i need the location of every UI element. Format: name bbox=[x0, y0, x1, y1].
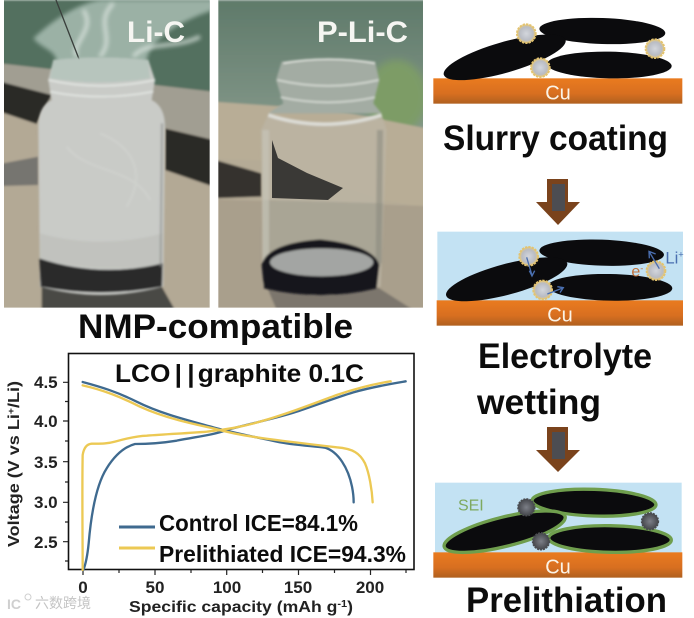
jar bbox=[261, 58, 387, 295]
particles with SEI bbox=[441, 487, 672, 561]
y axis title: Voltage (V vs Li bbox=[6, 433, 23, 547]
copper substrate bbox=[433, 78, 682, 104]
x axis numbers bbox=[78, 578, 384, 597]
x axis numbers: 150 bbox=[284, 578, 312, 597]
label: Li+: Li bbox=[665, 248, 678, 267]
heading: Electrolyte: Electrolyte bbox=[478, 337, 652, 376]
label: Li-C: Li-C bbox=[127, 16, 185, 49]
label: SEI: SEI bbox=[458, 497, 484, 514]
y axis title: + bbox=[6, 408, 16, 414]
y axis numbers: 3.5 bbox=[34, 453, 58, 472]
diagram: slurry coating stage bbox=[433, 16, 682, 104]
y axis numbers: 4.5 bbox=[34, 373, 58, 392]
label: e-: e bbox=[631, 264, 640, 281]
jar bbox=[38, 57, 165, 295]
active particles bbox=[440, 16, 672, 90]
dark spheres bbox=[518, 499, 658, 550]
control curve bbox=[83, 381, 406, 570]
axis ticks bbox=[63, 382, 406, 575]
watermark: 六数跨境 bbox=[35, 595, 91, 611]
x axis numbers: 0 bbox=[78, 578, 88, 597]
label: Cu: Cu bbox=[547, 304, 573, 326]
electrolyte bbox=[437, 232, 683, 302]
x axis numbers: 50 bbox=[146, 578, 164, 597]
curves bbox=[82, 381, 406, 570]
electrolyte bbox=[435, 483, 682, 553]
x axis numbers: 100 bbox=[213, 578, 241, 597]
heading: Slurry coating: Slurry coating bbox=[443, 119, 668, 158]
copper substrate bbox=[433, 552, 682, 578]
label: Cu: Cu bbox=[545, 82, 571, 104]
ion arrows bbox=[527, 251, 659, 294]
chart: voltage vs specific capacity bbox=[6, 354, 414, 616]
photo: P-Li-C jar bbox=[213, 0, 427, 310]
y axis numbers bbox=[34, 373, 58, 552]
watermark: IC bbox=[7, 596, 21, 612]
diagram: prelithiation stage bbox=[433, 483, 682, 578]
x axis title: -1 bbox=[337, 599, 348, 610]
label: Li+: + bbox=[678, 249, 684, 259]
y axis numbers: 3.0 bbox=[34, 493, 58, 512]
legend: prelithiated: Prelithiated ICE=94.3% bbox=[159, 541, 406, 567]
photo detail: dark shadow seen through P-Li-C jar bbox=[272, 140, 343, 200]
label: e-: - bbox=[640, 263, 643, 273]
chart title: LCO ||graphite 0.1C bbox=[115, 360, 364, 388]
y axis title: /Li) bbox=[6, 381, 23, 408]
legend: control: Control ICE=84.1% bbox=[159, 510, 358, 536]
x axis title: ) bbox=[347, 599, 353, 616]
arrow: down to prelithiation bbox=[536, 427, 580, 472]
diagram: electrolyte wetting stage bbox=[437, 232, 684, 326]
plot frame bbox=[68, 354, 414, 570]
copper substrate bbox=[437, 300, 683, 326]
lithium spheres bbox=[517, 24, 664, 77]
x axis title: Specific capacity (mAh g bbox=[129, 599, 318, 616]
watermark bbox=[7, 594, 91, 612]
prelithiated curve bbox=[82, 381, 391, 570]
x axis numbers: 200 bbox=[356, 578, 384, 597]
label: Cu: Cu bbox=[545, 556, 571, 578]
heading: wetting: wetting bbox=[476, 383, 601, 422]
smoke bbox=[33, 0, 213, 63]
label: P-Li-C: P-Li-C bbox=[317, 16, 408, 49]
y axis numbers: 2.5 bbox=[34, 533, 58, 552]
arrow: down to wetting bbox=[536, 179, 580, 225]
lithium spheres bbox=[519, 247, 665, 299]
heading: NMP-compatible: NMP-compatible bbox=[78, 308, 353, 346]
y axis numbers: 4.0 bbox=[34, 412, 58, 431]
photo: Li-C jar with smoke bbox=[0, 0, 213, 310]
active particles bbox=[442, 237, 673, 310]
